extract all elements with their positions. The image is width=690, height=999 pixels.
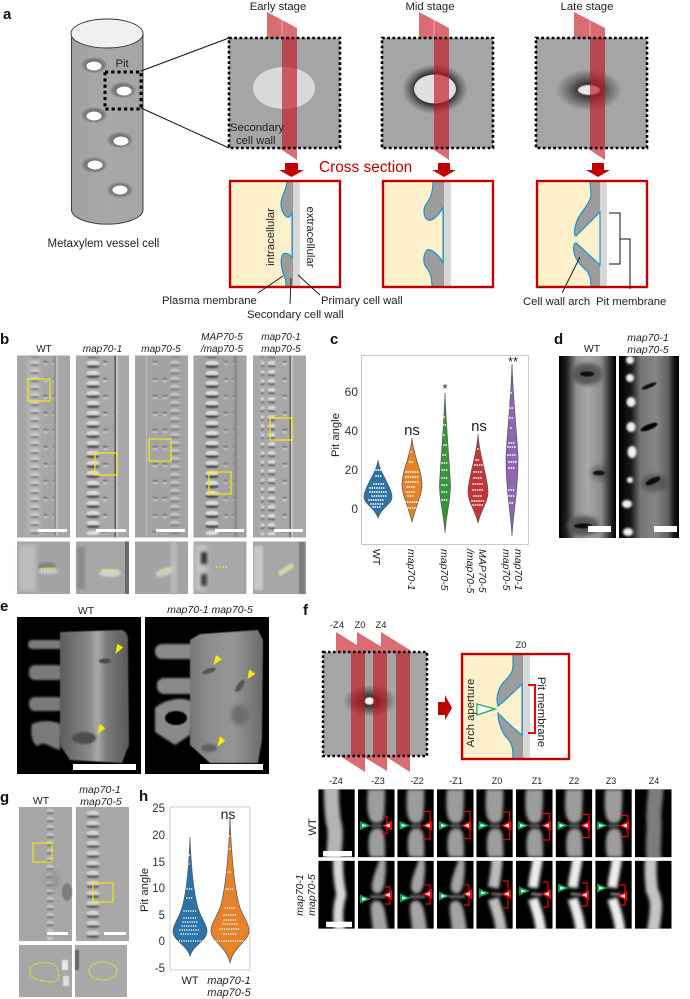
- h x axis labels: map70-1: [207, 975, 251, 987]
- d genotype labels: [584, 332, 669, 356]
- genotype labels: map70-1: [83, 344, 122, 355]
- Z plane labels: [330, 620, 387, 631]
- metaxylem vessel cell cylinder: [71, 19, 143, 224]
- red arrow: [438, 695, 452, 720]
- extracellular label: extracellular: [304, 207, 316, 268]
- h y axis labels: 20: [152, 830, 165, 842]
- h significance label: ns: [221, 806, 235, 822]
- h x axis labels: map70-5: [207, 987, 252, 999]
- montage column labels: [329, 776, 659, 786]
- late cross section diagram: [537, 181, 647, 287]
- montage row: map70-1 map70-5: [318, 858, 672, 932]
- image: map70-5: [135, 356, 188, 538]
- panel c: pit angle violin plot: [330, 331, 528, 594]
- panel letter b: b: [0, 331, 9, 348]
- genotype labels: [36, 332, 301, 355]
- significance labels: **: [508, 354, 518, 369]
- violin: map70-1 map70-5: [211, 817, 249, 963]
- violin: WT: [364, 460, 392, 518]
- x axis labels: map70-5: [438, 549, 450, 591]
- label: metaxylem vessel cell: Metaxylem vessel cell: [48, 238, 159, 250]
- h y axis labels: -5: [155, 963, 165, 975]
- violin: WT: [173, 837, 207, 956]
- Z plane labels: Z0: [354, 620, 366, 631]
- y axis title: Pit angle: [330, 413, 342, 457]
- image: map70-1: [76, 356, 129, 538]
- cross section labels: Pit membrane: [596, 296, 666, 308]
- montage column labels: Z0: [492, 776, 502, 786]
- image: map70-1 map70-5: [76, 807, 129, 941]
- image: WT fluorescence: [559, 356, 616, 538]
- g genotype labels: [33, 784, 122, 808]
- cross section labels: Primary cell wall: [321, 295, 403, 307]
- montage column labels: Z4: [649, 776, 659, 786]
- label: secondary cell wall: [230, 122, 284, 147]
- leader lines: [258, 257, 580, 304]
- cross section labels: [162, 295, 666, 321]
- y axis labels: 0: [351, 502, 358, 516]
- montage row: WT: [318, 786, 672, 860]
- stage titles: Early stage: [250, 1, 306, 13]
- early stage surface view: [229, 12, 340, 160]
- panel e: 3D reconstructions: [0, 598, 269, 774]
- x axis labels: MAP70-5: [476, 549, 488, 593]
- d genotype labels: map70-5: [627, 344, 669, 356]
- zoom lines: [141, 38, 229, 148]
- x axis labels: map70-1: [512, 549, 524, 590]
- label: arch aperture: Arch aperture: [465, 679, 477, 747]
- image: map70-1 map70-5 fluorescence: [619, 356, 679, 538]
- image: MAP70-5/map70-5: [194, 356, 246, 538]
- pit membrane red bracket: [528, 685, 535, 733]
- stage titles: [250, 1, 613, 13]
- x axis labels: map70-1: [405, 549, 417, 590]
- montage column labels: -Z4: [329, 776, 343, 786]
- x axis labels: WT: [370, 549, 382, 566]
- surface view with Z planes: [323, 632, 427, 772]
- Z0 cross section diagram: [462, 654, 569, 759]
- panel letter h: h: [139, 788, 148, 805]
- panel b: DIC images of pits: [0, 331, 306, 594]
- h y axis labels: 15: [152, 857, 165, 869]
- cross section arrows: [279, 163, 610, 177]
- genotype labels: WT: [36, 344, 52, 355]
- significance labels: [404, 354, 518, 439]
- Z plane labels: -Z4: [330, 620, 344, 631]
- label: pit: Pit: [116, 58, 130, 70]
- arch aperture triangle: [477, 704, 495, 715]
- cross section labels: Cell wall arch: [523, 296, 590, 308]
- violin: map70-1 map70-5: [506, 364, 518, 536]
- violin: map70-1: [402, 438, 422, 522]
- label: secondary cell wall: cell wall: [236, 135, 276, 147]
- label: secondary cell wall: Secondary: [230, 122, 284, 134]
- d genotype labels: map70-1: [627, 332, 669, 344]
- violin: map70-5: [440, 393, 450, 533]
- e genotype labels: map70-1 map70-5: [167, 604, 253, 616]
- early cross section diagram: [230, 181, 340, 287]
- y axis labels: 60: [345, 385, 358, 399]
- genotype labels: map70-5: [141, 344, 181, 355]
- e genotype labels: WT: [78, 605, 95, 617]
- image: WT: [17, 356, 70, 538]
- genotype labels: map70-5: [261, 344, 301, 355]
- 3D image: map70-1 map70-5: [145, 617, 269, 774]
- panel letter c: c: [330, 331, 338, 348]
- h y axis title: Pit angle: [139, 868, 151, 912]
- montage column labels: Z2: [569, 776, 579, 786]
- h axes frame: [170, 807, 250, 970]
- g genotype labels: WT: [33, 795, 50, 807]
- montage column labels: Z3: [606, 776, 616, 786]
- image: map70-1 map70-5: [253, 356, 306, 538]
- x axis labels: [370, 548, 524, 594]
- panel g: DIC images: [0, 784, 129, 997]
- h x axis labels: WT: [181, 975, 199, 987]
- e genotype labels: [78, 604, 253, 617]
- d genotype labels: WT: [584, 343, 601, 355]
- mid stage surface view: [382, 12, 493, 160]
- montage column labels: -Z1: [449, 776, 463, 786]
- Z0 label: Z0: [515, 640, 527, 651]
- h x axis labels: [181, 975, 252, 999]
- panel d: fluorescence images: [554, 331, 679, 538]
- stage titles: Late stage: [561, 1, 613, 13]
- montage row label: map70-1 map70-5: map70-5: [306, 874, 318, 916]
- y axis labels: 20: [345, 463, 358, 477]
- x axis labels: /map70-5: [464, 548, 476, 594]
- montage column labels: -Z3: [371, 776, 385, 786]
- axes frame: [362, 356, 528, 544]
- panel h: pit angle violin plot: [139, 788, 252, 999]
- montage row label: WT: WT: [307, 818, 319, 836]
- label: pit membrane: Pit membrane: [535, 677, 547, 747]
- thumbnails with yellow pit outlines: [19, 945, 127, 997]
- montage row label: map70-1 map70-5: [294, 874, 318, 916]
- genotype labels: map70-1: [261, 332, 301, 343]
- intracellular label: intracellular: [265, 208, 277, 266]
- g genotype labels: map70-1: [79, 784, 121, 796]
- h y axis labels: 5: [159, 910, 165, 922]
- panel a: pit development stages: [3, 1, 666, 321]
- h y axis labels: 25: [152, 803, 165, 815]
- pit membrane bracket: [609, 213, 630, 289]
- g genotype labels: map70-5: [80, 796, 122, 808]
- panel f: Z series: [294, 602, 672, 932]
- h y axis labels: 10: [152, 883, 165, 895]
- montage column labels: -Z2: [410, 776, 424, 786]
- h y axis labels: [152, 803, 165, 975]
- cross section heading: Cross section: [319, 159, 412, 176]
- late stage surface view: [536, 12, 647, 160]
- image: WT: [19, 807, 72, 941]
- genotype labels: MAP70-5: [201, 332, 243, 343]
- y axis labels: 40: [345, 424, 358, 438]
- cross section labels: Secondary cell wall: [247, 309, 344, 321]
- significance labels: ns: [404, 422, 420, 439]
- panel letter f: f: [303, 602, 309, 619]
- significance labels: *: [442, 381, 448, 396]
- significance labels: ns: [471, 418, 487, 435]
- montage column labels: Z1: [532, 776, 542, 786]
- x axis labels: map70-5: [500, 549, 512, 591]
- panel letter a: a: [3, 6, 12, 23]
- thumbnails with yellow dotted pit axes: [17, 542, 306, 594]
- h y axis labels: 0: [159, 936, 165, 948]
- montage row label: map70-1 map70-5: map70-1: [294, 874, 306, 916]
- mid cross section diagram: [383, 181, 493, 287]
- panel letter g: g: [0, 789, 9, 806]
- panel letter e: e: [0, 598, 8, 615]
- y axis labels: [345, 385, 358, 516]
- stage titles: Mid stage: [406, 1, 454, 13]
- violin: MAP70-5/map70-5: [468, 434, 488, 523]
- panel letter d: d: [554, 331, 563, 348]
- cross section labels: Plasma membrane: [162, 295, 257, 307]
- Z plane labels: Z4: [375, 620, 387, 631]
- 3D image: WT: [17, 617, 141, 774]
- genotype labels: /map70-5: [200, 344, 244, 355]
